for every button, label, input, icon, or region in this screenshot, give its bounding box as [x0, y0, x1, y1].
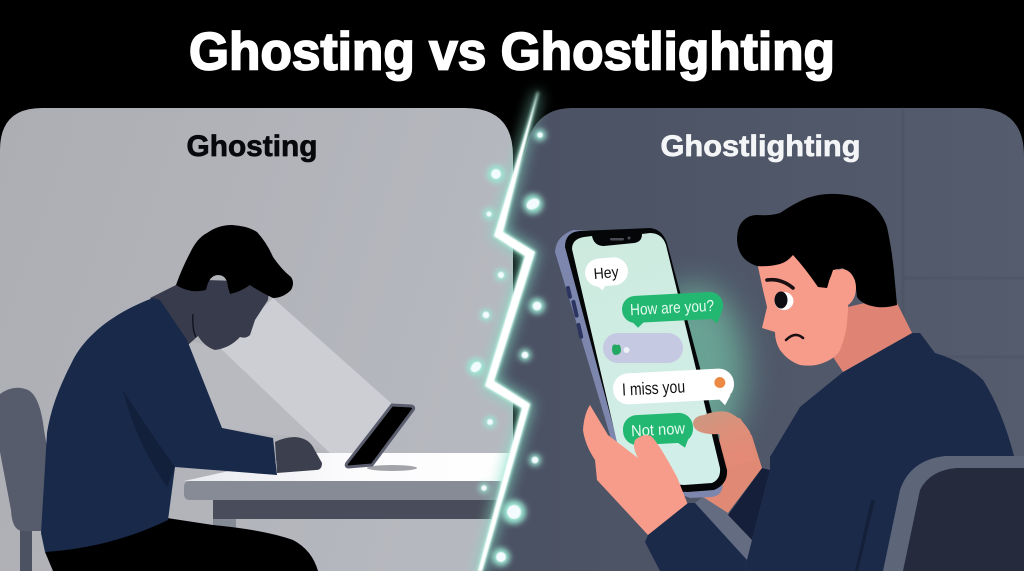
particle cores — [469, 132, 543, 562]
sweater — [41, 298, 277, 552]
sparkle particles — [467, 129, 546, 566]
arm shadow — [123, 390, 175, 487]
face and neck — [150, 280, 270, 350]
trousers — [45, 518, 318, 571]
bubble: Hey — [584, 256, 629, 292]
bubble: How are you?: How are you? — [630, 298, 715, 319]
light beam from phone — [187, 298, 391, 467]
heading: Ghosting: Ghosting — [186, 130, 318, 163]
silhouette person — [41, 225, 322, 571]
desk — [184, 453, 510, 571]
title: Ghosting vs Ghostlighting — [189, 22, 835, 82]
wall grid lines — [903, 108, 1024, 357]
person sweater — [745, 333, 1014, 571]
phone on desk — [346, 405, 417, 471]
grey wedge behind sleeve — [695, 497, 752, 560]
back hand — [703, 418, 762, 513]
worried eye — [774, 292, 794, 310]
thumb on screen — [693, 411, 755, 466]
chair — [0, 388, 58, 571]
bubble: lavender — [603, 333, 683, 363]
bolt inner glow — [478, 92, 538, 571]
neck — [833, 300, 912, 372]
lightning divider — [478, 92, 538, 571]
bubble: I miss you: I miss you — [622, 376, 686, 400]
hand — [275, 437, 322, 473]
panel background — [0, 108, 513, 571]
chair — [883, 456, 1024, 571]
black frame — [565, 228, 727, 492]
far sleeve cuff — [728, 468, 770, 540]
screen — [572, 233, 720, 485]
speaker and camera — [610, 236, 630, 240]
phone glow — [645, 285, 745, 455]
hair — [176, 225, 293, 298]
side buttons — [566, 286, 584, 339]
panel background — [480, 108, 1024, 571]
bolt glow — [478, 92, 538, 571]
bubble: I miss you — [612, 368, 735, 411]
bubble: How are you? — [621, 291, 724, 329]
bubble: Hey: Hey — [593, 264, 620, 283]
frown — [786, 335, 803, 340]
hair — [737, 194, 897, 307]
bolt core — [478, 92, 538, 571]
front hand — [583, 405, 688, 535]
panel: ghosting — [0, 108, 513, 571]
neck crease — [193, 314, 196, 337]
smartphone — [555, 228, 735, 498]
phone body — [555, 230, 723, 498]
bubble: Not now: Not now — [631, 421, 686, 440]
bubble: Not now — [622, 412, 694, 451]
panel: ghostlighting — [480, 108, 1024, 571]
particle glows — [467, 129, 546, 566]
head — [757, 245, 850, 366]
heading: Ghostlighting: Ghostlighting — [660, 130, 860, 163]
ear — [828, 269, 856, 307]
eyebrow — [767, 280, 793, 288]
front sleeve — [645, 503, 747, 571]
